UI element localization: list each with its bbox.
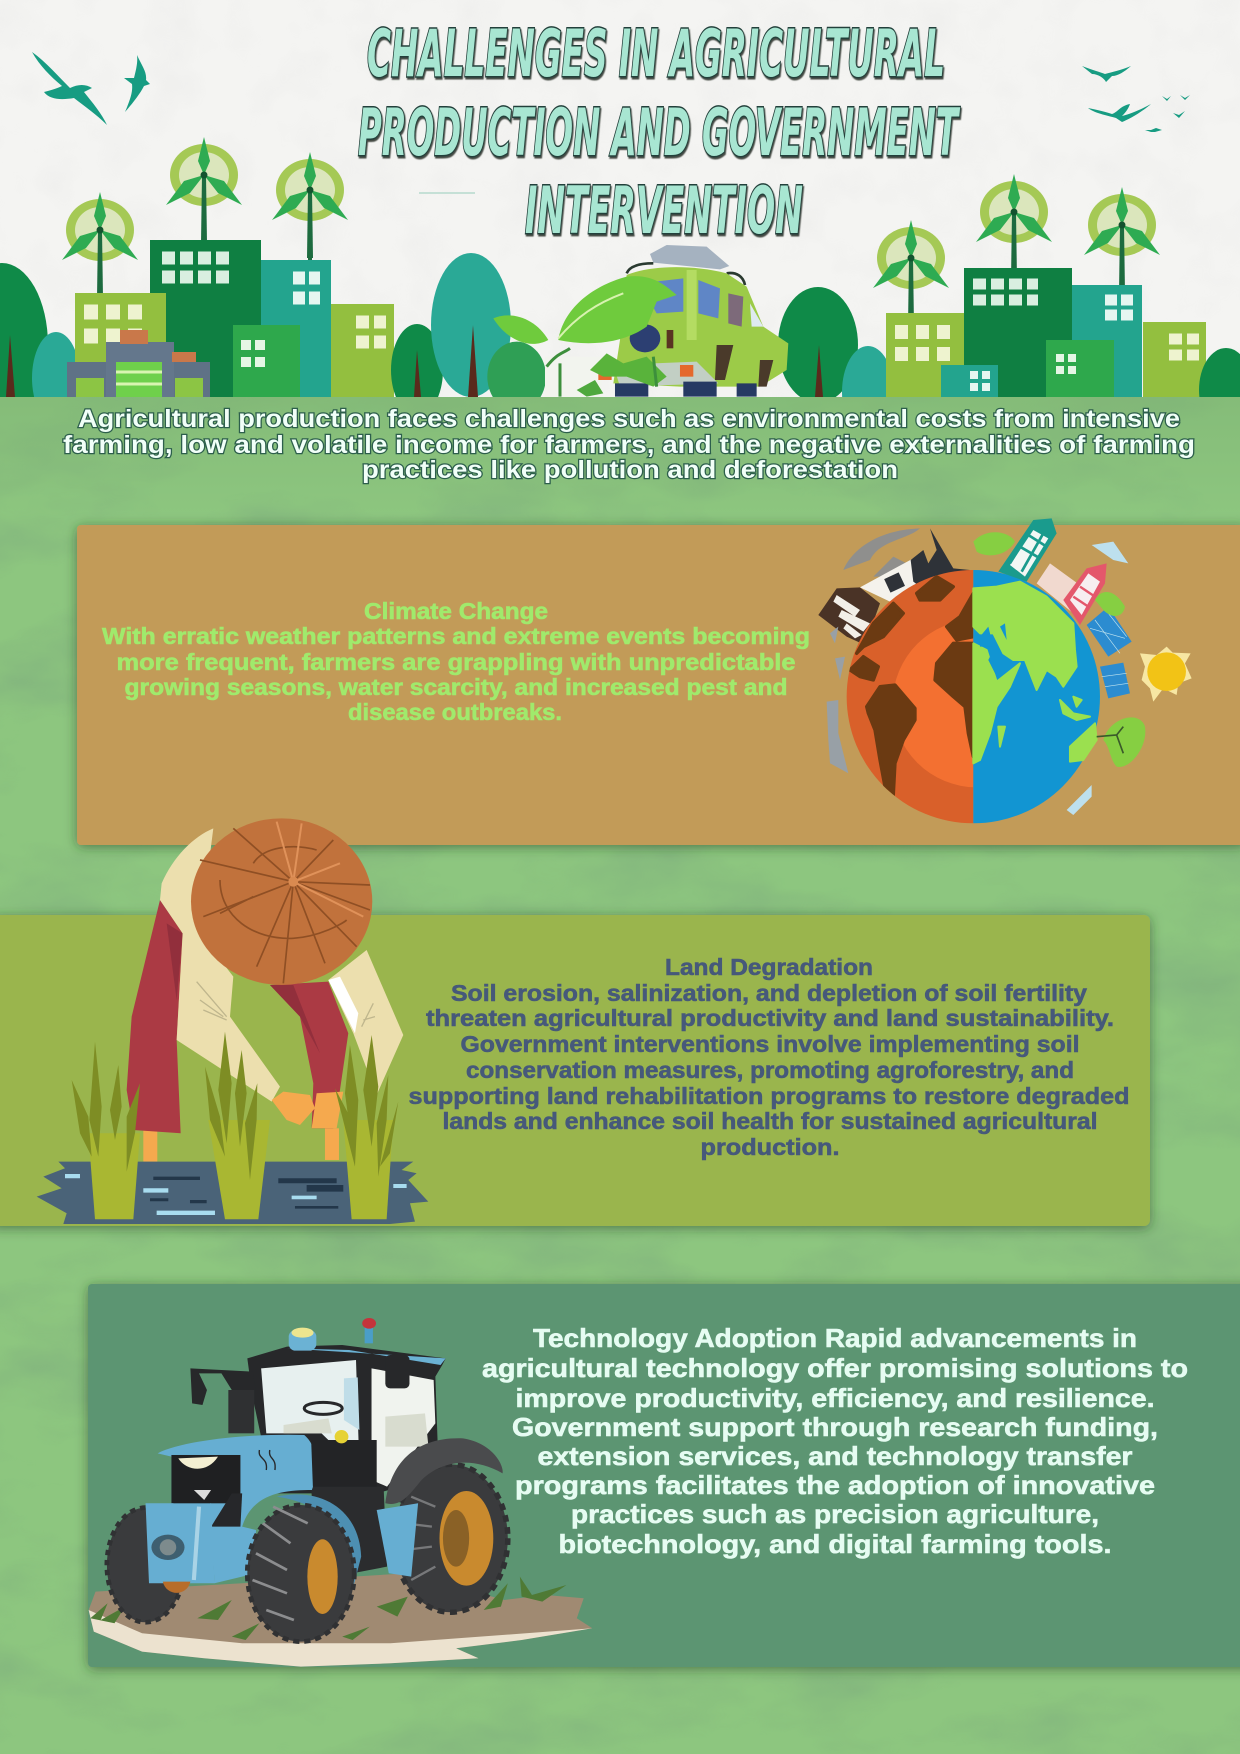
- panel: land degradation: [0, 818, 1150, 1226]
- technology adoption text: agricultural technology offer promising solutions to: [482, 1353, 1188, 1383]
- icon: green jeep with leaves: [487, 245, 788, 412]
- header illustration: green city skyline: [0, 0, 1240, 438]
- icon: blue tractor on muddy ground: [89, 1318, 592, 1667]
- farmer legs: [143, 1128, 339, 1162]
- land degradation text: conservation measures, promoting agroforestry, and: [466, 1057, 1074, 1083]
- icon: half-polluted half-green globe: [818, 518, 1192, 823]
- panel: climate change: [77, 518, 1240, 845]
- intro text block: farming, low and volatile income for farmers, and the negative externalities of farming: [63, 431, 1195, 459]
- land degradation text: lands and enhance soil health for sustained agricultural: [442, 1108, 1098, 1134]
- rear fender: [385, 1438, 503, 1504]
- icon: birds left: [32, 52, 1190, 132]
- chassis: [311, 1487, 387, 1573]
- title: [358, 17, 960, 249]
- tractor cab: [190, 1318, 446, 1493]
- technology adoption text: Technology Adoption Rapid advancements in: [533, 1323, 1137, 1353]
- climate change text: disease outbreaks.: [348, 699, 562, 725]
- climate change text: more frequent, farmers are grappling with unpredictable: [116, 649, 796, 675]
- technology adoption text: improve productivity, efficiency, and resilience.: [516, 1383, 1154, 1413]
- intro text block: [63, 405, 1195, 484]
- front wheel: [247, 1494, 361, 1642]
- technology adoption text: extension services, and technology transfer: [538, 1441, 1132, 1471]
- climate change text: [102, 598, 810, 725]
- leaves: [558, 276, 677, 343]
- rear wheel: [394, 1464, 508, 1612]
- icon: farmer planting rice: [37, 818, 428, 1224]
- muddy ground: [89, 1573, 592, 1667]
- technology adoption text: programs facilitates the adoption of innovative: [515, 1470, 1155, 1500]
- land degradation text: Land Degradation: [665, 954, 873, 980]
- land degradation text: Soil erosion, salinization, and depletion of soil fertility: [451, 980, 1087, 1006]
- land degradation text: supporting land rehabilitation programs to restore degraded: [408, 1083, 1130, 1109]
- conical hat: [191, 818, 372, 985]
- land degradation text: threaten agricultural productivity and land sustainability.: [426, 1005, 1114, 1031]
- icon: wind turbines left: [62, 137, 348, 298]
- icon: battery storage station: [67, 330, 210, 397]
- rice clumps: [88, 1120, 393, 1219]
- land degradation text: Government interventions involve implementing soil: [460, 1031, 1080, 1057]
- intro text block: practices like pollution and deforestation: [362, 456, 898, 484]
- right skyline trees and buildings: [778, 268, 1240, 397]
- technology adoption text: practices such as precision agriculture,: [571, 1499, 1099, 1529]
- water: [37, 1162, 428, 1224]
- land degradation text: [408, 954, 1130, 1160]
- left skyline trees and buildings: [0, 240, 511, 397]
- icon: wind turbines right: [873, 174, 1160, 326]
- technology adoption text: Government support through research funding,: [512, 1412, 1158, 1442]
- panel: technology adoption: [88, 1284, 1240, 1667]
- climate change text: growing seasons, water scarcity, and increased pest and: [124, 674, 788, 700]
- rear left tyre: [107, 1508, 184, 1622]
- title: INTERVENTION: [525, 174, 803, 249]
- climate change text: Climate Change: [364, 598, 548, 624]
- technology adoption text: biotechnology, and digital farming tools.: [558, 1529, 1112, 1559]
- technology adoption text: [482, 1323, 1188, 1559]
- hood and front weight: [146, 1430, 418, 1593]
- intro text block: Agricultural production faces challenges such as environmental costs from intensive: [78, 405, 1180, 433]
- land degradation text: production.: [700, 1134, 840, 1160]
- climate change text: With erratic weather patterns and extreme events becoming: [102, 623, 810, 649]
